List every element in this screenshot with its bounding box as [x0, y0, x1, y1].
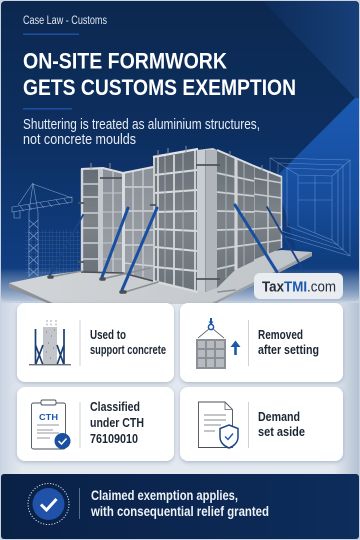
card text	[258, 410, 305, 439]
divider	[80, 402, 81, 448]
side wall	[217, 150, 282, 288]
braces	[49, 205, 303, 293]
card text	[258, 328, 319, 357]
title	[23, 48, 296, 100]
corner pillar	[197, 148, 217, 292]
clamps	[78, 165, 220, 279]
icon: lifted panel with arrow	[196, 318, 240, 369]
subtitle: not concrete moulds	[23, 132, 136, 148]
divider	[248, 402, 249, 448]
divider	[248, 320, 249, 366]
card text: under CTH	[90, 415, 144, 430]
formwork structure	[78, 146, 282, 292]
card text: after setting	[258, 343, 319, 357]
card text: Used to	[90, 328, 126, 342]
panel: conclusion band	[1, 474, 359, 539]
slab	[9, 250, 312, 304]
card text: set aside	[258, 425, 305, 439]
card text: Demand	[258, 410, 300, 424]
conclusion text	[90, 488, 269, 519]
card text: Removed	[258, 328, 303, 342]
icon: check badge	[28, 484, 69, 524]
conclusion text: with consequential relief granted	[90, 504, 269, 519]
icon: document with shield	[198, 402, 238, 448]
panel: classified under CTH	[17, 387, 174, 461]
icon: clipboard CTH	[32, 400, 70, 449]
card text	[90, 399, 144, 446]
card text	[90, 328, 166, 357]
icon: concrete column with props	[29, 320, 71, 365]
icon: clipboard CTH: CTH	[39, 412, 58, 422]
title: ON-SITE FORMWORK	[23, 48, 228, 74]
eyebrow label: Case Law - Customs	[23, 15, 107, 27]
front wall	[153, 149, 198, 292]
icon: window wireframe	[270, 158, 350, 256]
subtitle	[23, 117, 260, 148]
eyebrow rule	[23, 34, 79, 35]
card text: 76109010	[90, 431, 138, 446]
panel: demand set aside	[180, 387, 343, 461]
title rule	[23, 108, 72, 110]
conclusion text: Claimed exemption applies,	[91, 488, 238, 503]
panel: used to support concrete	[17, 303, 174, 382]
divider	[80, 320, 81, 366]
logo chip: TaxTMI.com	[262, 280, 336, 296]
left wall	[81, 167, 153, 281]
card text: support concrete	[90, 343, 166, 357]
logo chip	[254, 273, 343, 299]
icon: crane line art	[12, 183, 80, 277]
card text: Classified	[90, 399, 140, 414]
subtitle: Shuttering is treated as aluminium structures,	[23, 117, 260, 133]
divider	[79, 488, 80, 519]
title: GETS CUSTOMS EXEMPTION	[23, 75, 296, 100]
rear right wall	[253, 165, 282, 261]
panel: removed after setting	[180, 303, 343, 382]
